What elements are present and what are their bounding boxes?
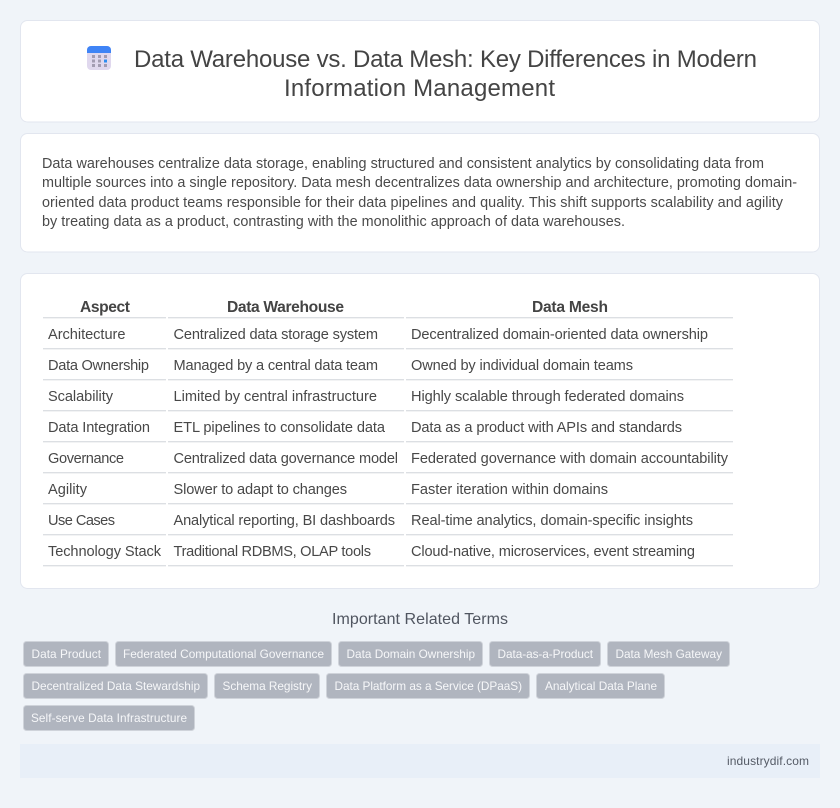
table header: Data Mesh [532,299,608,316]
table header [80,299,608,316]
row: use cases [48,513,693,529]
tags: related terms: Schema Registry [222,679,312,693]
tags: related terms: Self-serve Data Infrastructure [31,711,187,725]
text block: description: oriented data product teams responsible for their data pipelines and quality. This shift supports scalability and agility [42,195,784,211]
row: agility [48,482,608,498]
row: data integration: Data Integration [48,420,150,436]
tags: related terms: Data Platform as a Service (DPaaS) [334,679,522,693]
text block: description: multiple sources into a single repository. Data mesh decentralizes data ownership and architecture, promoting domain- [42,175,797,191]
tags: related terms: Data Mesh Gateway [616,647,722,661]
row: data ownership: Managed by a central data team [174,358,378,374]
row: agility: Agility [48,482,88,498]
row: scalability: Highly scalable through federated domains [411,389,684,405]
row: scalability: Limited by central infrastructure [174,389,377,405]
tags: related terms [24,642,730,730]
row: data integration [48,420,682,436]
row: agility: Slower to adapt to changes [174,482,347,498]
table header: Aspect [80,299,130,316]
row: governance [48,451,729,467]
row: architecture: Architecture [48,327,126,343]
row: scalability [48,389,684,405]
row: data ownership [48,358,633,374]
row: data ownership: Owned by individual domain teams [411,358,633,374]
row: technology stack: Traditional RDBMS, OLAP tools [174,544,371,560]
tags: related terms: Data-as-a-Product [498,647,594,661]
row: scalability: Scalability [48,389,114,405]
text block: description: by treating data as a product, contrasting with the monolithic approach of data warehouses. [42,214,625,230]
tags: related terms: Analytical Data Plane [545,679,657,693]
tags: related terms: Data Product [32,647,102,661]
row: governance: Federated governance with domain accountability [411,451,729,467]
panel: comparison table [20,274,820,588]
icon: data warehouse grid [87,46,111,70]
row: architecture: Centralized data storage system [174,327,378,343]
row: technology stack: Cloud-native, microservices, event streaming [411,544,695,560]
footer: industrydif.com [727,754,809,768]
row: architecture: Decentralized domain-oriented data ownership [411,327,708,343]
panel: header [20,20,820,122]
tags: related terms: Federated Computational Governance [123,647,324,661]
title [134,46,757,102]
tags: related terms: Data Domain Ownership [346,647,475,661]
row: use cases: Analytical reporting, BI dashboards [174,513,395,529]
title: Information Management [284,75,555,102]
heading: related terms: Important Related Terms [332,611,508,628]
footer [20,744,820,778]
tags: related terms: Decentralized Data Stewardship [32,679,200,693]
row: data integration: ETL pipelines to consolidate data [174,420,386,436]
text block: description: Data warehouses centralize data storage, enabling structured and consistent analytics by consolidating data from [42,156,764,172]
row: governance: Centralized data governance model [174,451,398,467]
text block: description [42,156,797,230]
row: technology stack: Technology Stack [48,544,162,560]
row: data ownership: Data Ownership [48,358,149,374]
row: technology stack [48,544,695,560]
row: agility: Faster iteration within domains [411,482,608,498]
row: architecture [48,327,708,343]
row: use cases: Use Cases [48,513,115,529]
table header: Data Warehouse [227,299,344,316]
row: governance: Governance [48,451,124,467]
row: use cases: Real-time analytics, domain-specific insights [411,513,693,529]
title: Data Warehouse vs. Data Mesh: Key Differences in Modern [134,46,757,73]
row: data integration: Data as a product with APIs and standards [411,420,682,436]
panel: description [20,134,820,252]
